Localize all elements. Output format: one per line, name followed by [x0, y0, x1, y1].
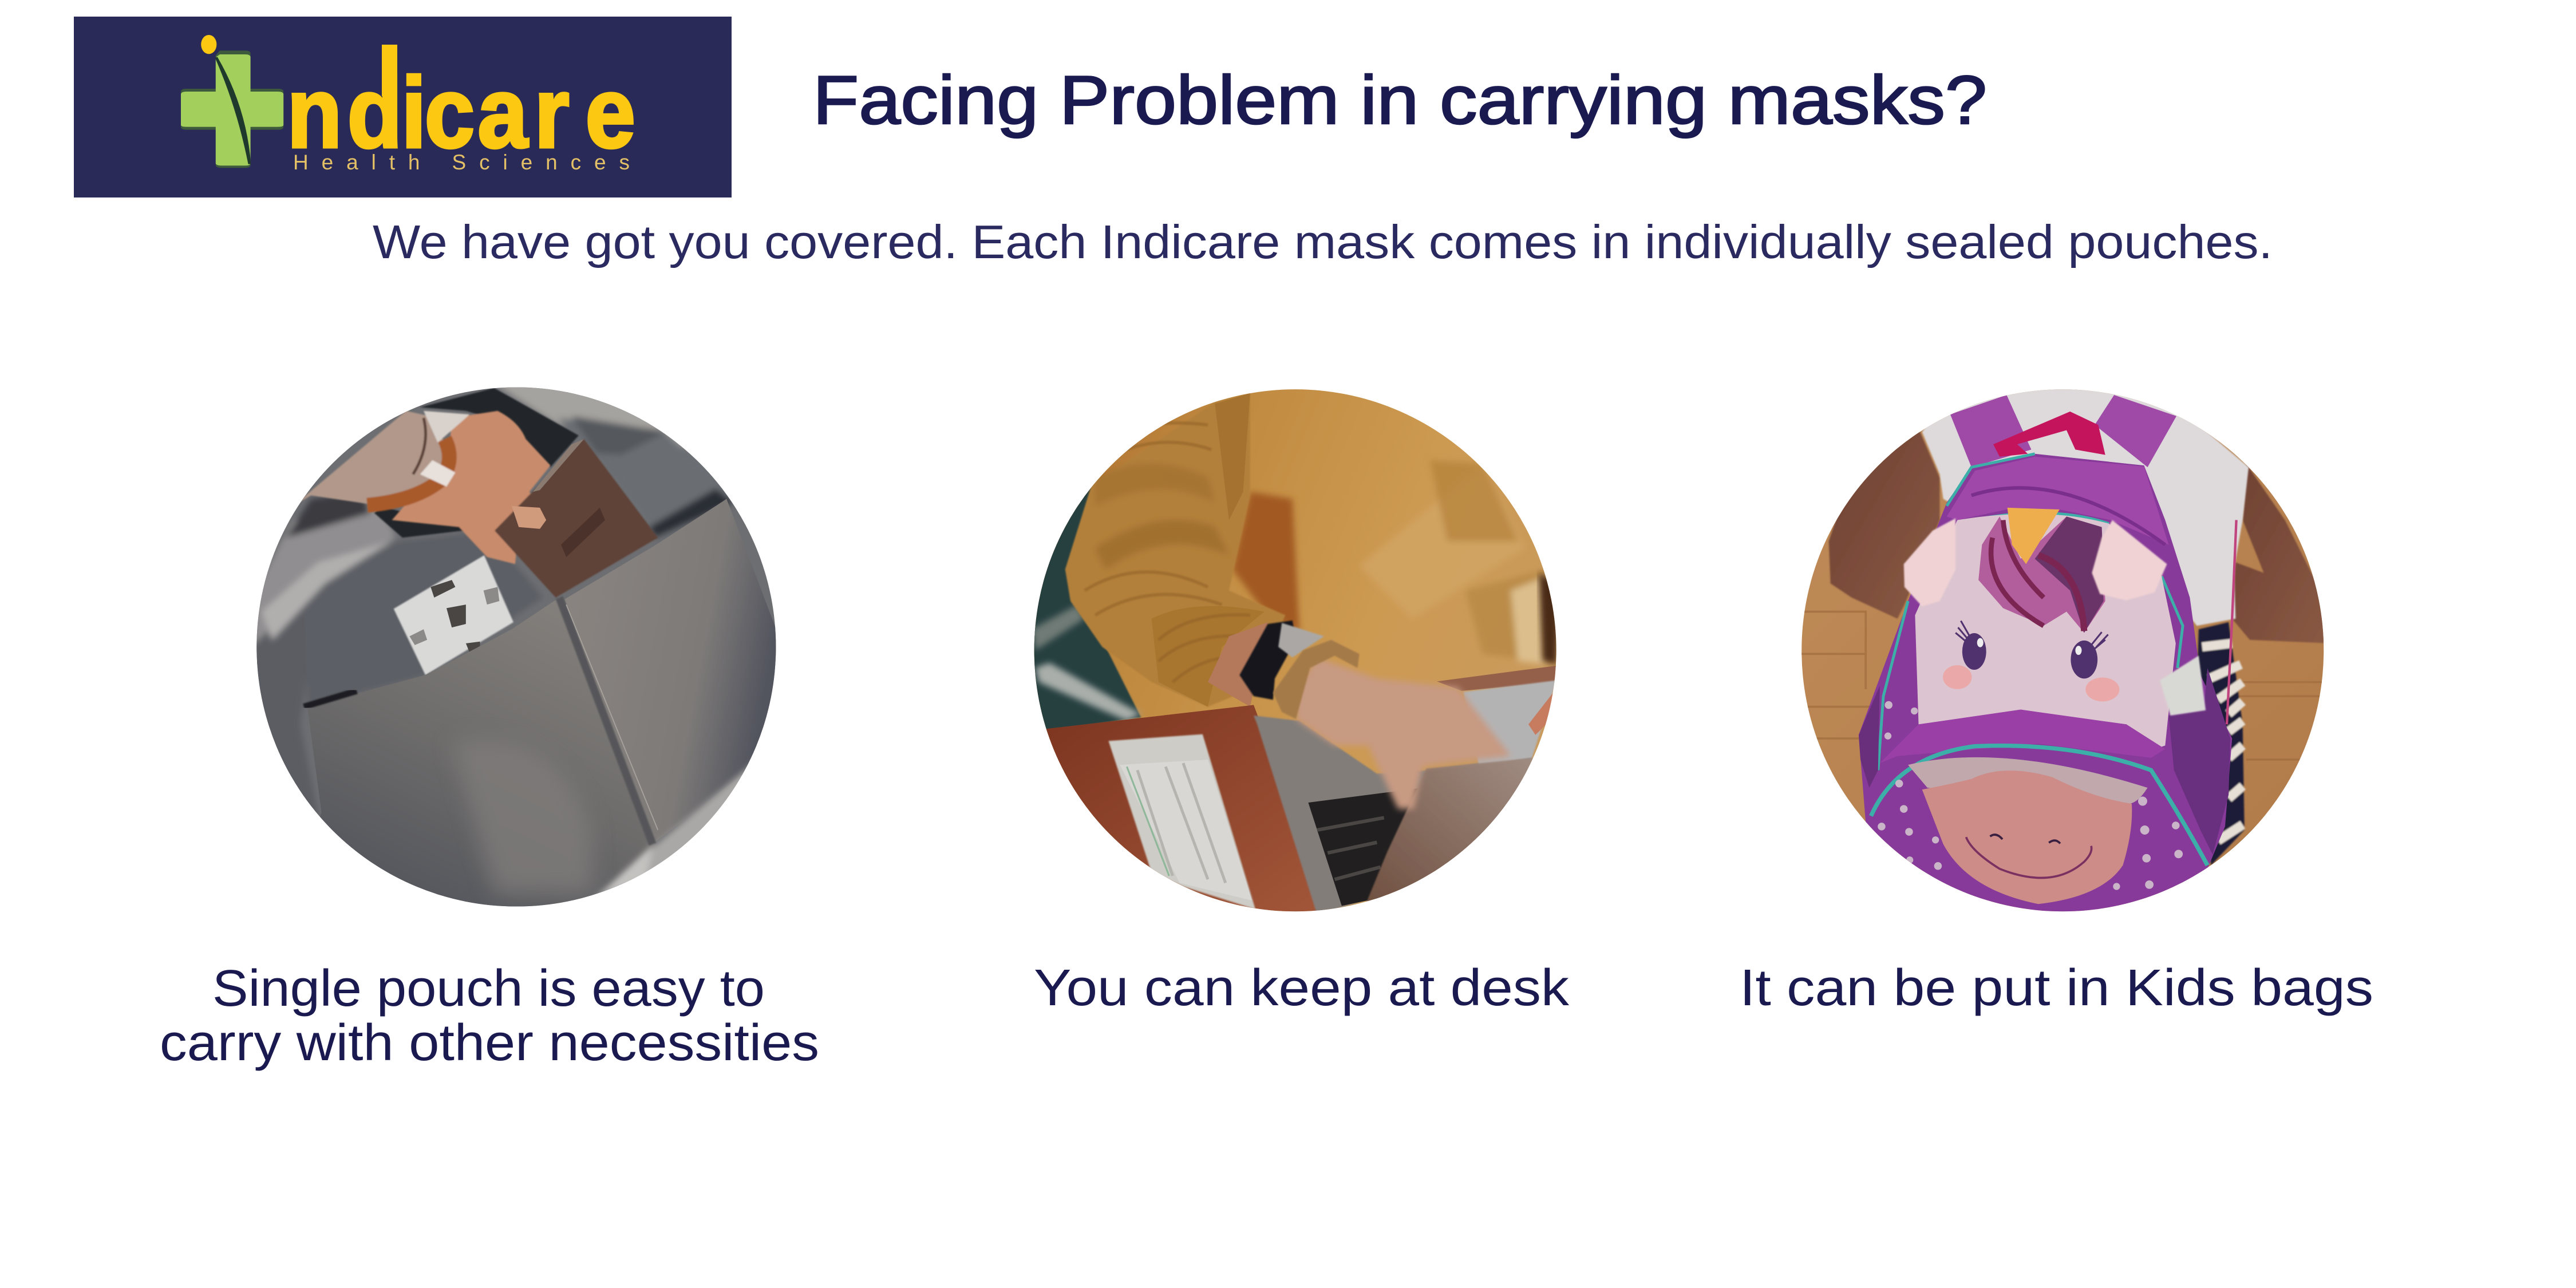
- logo: Indicare Health Sciences: [74, 17, 732, 197]
- cheeks: [1943, 665, 1971, 689]
- caption: desk: You can keep at desk: [1034, 959, 1570, 1017]
- hand: [1296, 657, 1511, 809]
- lit patches on sweater: [1360, 464, 1525, 619]
- handle: [1993, 412, 2105, 457]
- horn: [2008, 508, 2060, 564]
- bracelets: [1239, 621, 1296, 700]
- caption: single pouch: Single pouch is easy to: [212, 960, 765, 1017]
- straps: [1950, 395, 2176, 467]
- white shirt: [1922, 379, 2249, 626]
- wordmark: ndicare: [287, 57, 635, 169]
- teal piping: [1878, 454, 2183, 770]
- sleeve: [1065, 393, 1285, 707]
- d ascender of the wordmark: [382, 45, 397, 96]
- unicorn face: [1915, 514, 2176, 749]
- caption: kids bags: It can be put in Kids bags: [1740, 959, 2373, 1017]
- caption: single pouch: carry with other necessities: [160, 1014, 819, 1072]
- forearm and hand: [293, 411, 551, 564]
- table: [1039, 705, 1335, 922]
- mane: [1978, 516, 2105, 633]
- black strap: [374, 388, 579, 538]
- pocket slit: [304, 691, 357, 707]
- right arm: [2232, 464, 2331, 643]
- photo: child wearing unicorn backpack with mask in side pocket: [1792, 372, 2341, 922]
- pink cord: [2227, 520, 2237, 724]
- side mesh pocket: [2168, 668, 2230, 855]
- eyes: [1962, 633, 1986, 670]
- subtitle: We have got you covered. Each Indicare mask comes in individually sealed pouches.: [373, 215, 2273, 268]
- bag top, blurred background: [496, 387, 686, 450]
- tablet screen: [1463, 680, 1556, 767]
- smile: [1966, 837, 2092, 878]
- ears: [1904, 518, 1955, 606]
- photo: person at desk with laptop and mask pouch: [1025, 372, 1574, 922]
- photo: hand pulling wallet and mask pouch from a grey bag: [256, 387, 776, 907]
- seam: [559, 598, 653, 844]
- upper pocket: [1947, 457, 2168, 545]
- icon: green medical cross with yellow dot: [181, 35, 283, 168]
- lower pocket and muzzle: [1908, 757, 2148, 804]
- backpack body: [1859, 454, 2232, 922]
- mask pouch in side pocket: [2160, 655, 2206, 716]
- lower shadow and highlights: [452, 740, 592, 894]
- forearm: [1208, 622, 1268, 707]
- mask pouch: [1108, 734, 1255, 909]
- stars: [1878, 701, 2183, 890]
- laptop: [1254, 716, 1532, 915]
- wallet: [495, 439, 658, 598]
- mask pouch: [394, 555, 513, 675]
- striped shorts: [2197, 622, 2245, 866]
- knit ribs: [1085, 423, 1250, 682]
- title: Facing Problem in carrying masks?: [813, 62, 1987, 139]
- thumb over wallet: [512, 506, 546, 529]
- tagline: Health Sciences: [293, 151, 630, 174]
- laptop lid: [1363, 758, 1534, 911]
- caption: single pouch: [160, 960, 819, 1072]
- floor tile lines: [1799, 611, 2327, 760]
- keyboard: [1308, 788, 1423, 906]
- pocket right of seam: [564, 499, 783, 844]
- left arm: [1829, 428, 1939, 619]
- pocket left of seam: [290, 598, 654, 922]
- teal background and book: [1025, 478, 1141, 738]
- lower band: [1880, 710, 2165, 763]
